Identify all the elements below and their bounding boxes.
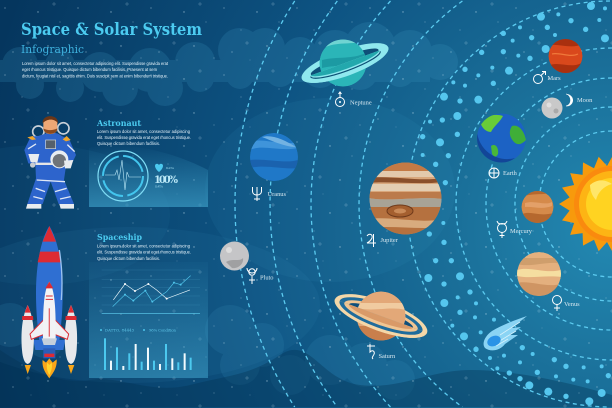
planet: Neptune — [302, 40, 388, 86]
planet: Mercury — [522, 191, 554, 223]
planet: Saturn — [334, 292, 428, 340]
subtitle: Infographic — [21, 42, 84, 56]
spaceship rocket — [22, 226, 77, 378]
label: Moon: Moon — [577, 97, 593, 104]
spaceship text — [97, 244, 191, 261]
orbits — [235, 1, 612, 407]
intro text: Lorem ipsum dolor sit amet, consectetur adipiscing elit. Suspendisse gravida erat — [22, 61, 169, 66]
line chart — [102, 270, 200, 314]
label: Earth — [489, 168, 518, 178]
asteroid belt upper — [420, 2, 609, 185]
planet: Venus — [517, 252, 561, 297]
label: Earth: Earth — [503, 170, 518, 177]
chart legend: 96% Condition — [149, 328, 177, 332]
planet: Earth — [475, 114, 526, 163]
comet — [484, 316, 527, 350]
panel: spaceship charts — [89, 262, 208, 378]
spaceship text: Quisque dictum bibendum facilisis. — [97, 256, 160, 261]
label: Mercury: Mercury — [510, 228, 533, 235]
label: Mercury — [497, 221, 533, 238]
label: Uranus — [252, 187, 286, 201]
label: Pluto — [247, 268, 274, 284]
label: Mars — [534, 72, 561, 84]
title: Space & Solar System — [21, 20, 202, 40]
planet: Pluto — [220, 242, 249, 270]
planet: Mars — [548, 39, 583, 73]
label: Jupiter — [367, 234, 399, 247]
label: Neptune — [336, 92, 372, 106]
panel: astronaut data: 100% — [154, 175, 178, 186]
label: Venus: Venus — [564, 301, 580, 308]
chart legend: DATTO, 84443 — [105, 328, 135, 332]
bar chart — [104, 338, 192, 370]
intro text: eget rhoncus tristique. Quisque dictum bibendum facilisis. Praesent at sem — [22, 67, 158, 72]
heading: Astronaut: Astronaut — [96, 119, 141, 129]
label: Pluto: Pluto — [260, 274, 274, 282]
planet: Uranus — [250, 133, 298, 181]
astronaut text — [97, 129, 191, 146]
label: Saturn — [367, 344, 396, 360]
label: Neptune: Neptune — [350, 100, 372, 106]
planet: Jupiter — [369, 162, 442, 235]
label: Moon — [566, 94, 593, 106]
astronaut text: elit. Suspendisse gravida erat eget rhoncus tristique. — [97, 135, 191, 140]
label: Venus — [552, 296, 580, 311]
panel: astronaut data — [89, 145, 208, 207]
intro text: dictum, feugiat nisl et, sagittis enim. Duis suscipit sem at enim bibendum tristique. — [22, 74, 168, 78]
astronaut text: Quisque dictum bibendum facilisis. — [97, 141, 160, 146]
label: Mars: Mars — [548, 75, 561, 82]
label: Saturn: Saturn — [378, 353, 396, 360]
spaceship text: elit. Suspendisse gravida erat eget rhoncus tristique. — [97, 250, 191, 254]
panel: astronaut data: DATA — [155, 184, 164, 188]
intro text — [22, 61, 169, 78]
planet: Moon — [542, 98, 562, 118]
astronaut text: Lorem ipsum dolor sit amet, consectetur adipiscing — [97, 129, 191, 134]
astronaut — [24, 116, 76, 209]
label: Jupiter: Jupiter — [380, 237, 399, 244]
asteroid belt lower — [424, 221, 611, 405]
label: Uranus: Uranus — [268, 191, 286, 198]
panel: astronaut data: DATA — [166, 166, 175, 170]
sun — [559, 157, 612, 251]
spaceship text: Lorem ipsum dolor sit amet, consectetur adipiscing — [97, 244, 191, 248]
heading: Spaceship: Spaceship — [97, 233, 142, 243]
chart legend — [100, 328, 177, 332]
